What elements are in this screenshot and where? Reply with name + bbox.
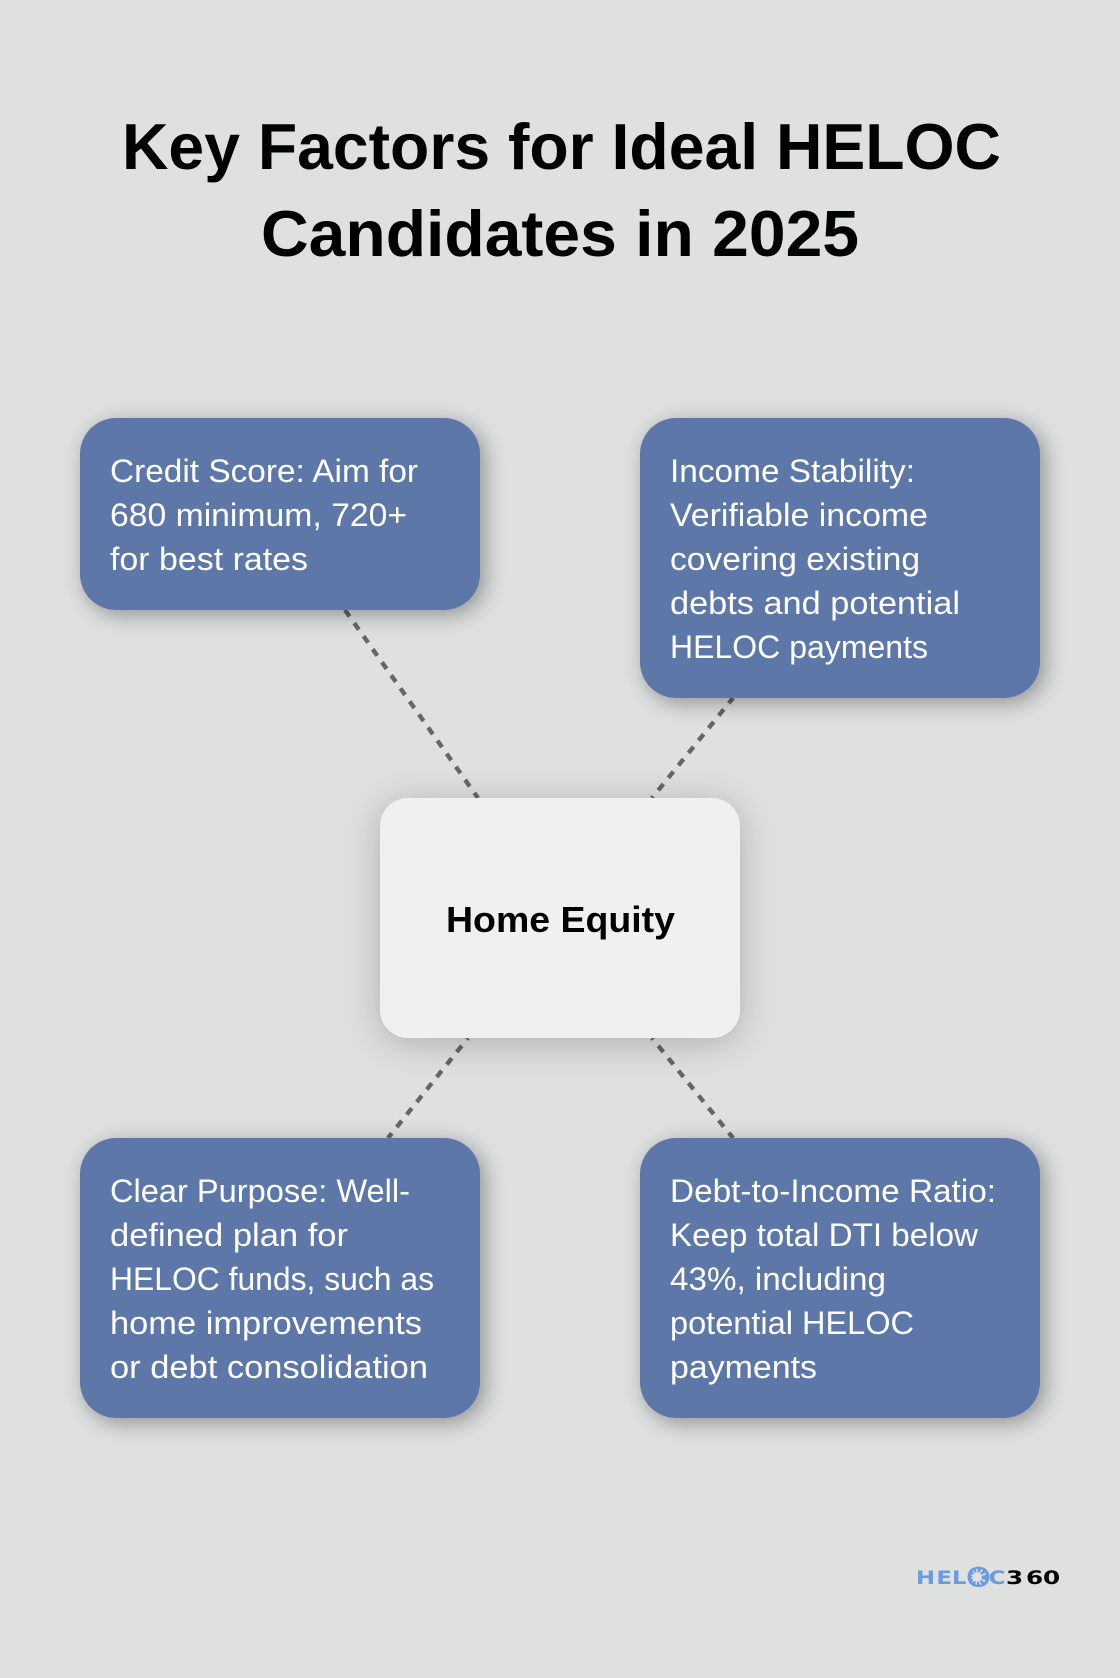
panel: clear purpose: defined plan for: [110, 1217, 348, 1253]
panel: income stability: Income Stability:: [670, 453, 915, 489]
panel: home equity center: Home Equity: [446, 899, 675, 940]
title: [122, 110, 1001, 270]
logo: HELOC360: O: [966, 1562, 991, 1594]
panel: clear purpose: [80, 1138, 480, 1418]
panel: income stability: Verifiable income: [670, 497, 928, 533]
panel: debt-to-income ratio: payments: [670, 1349, 817, 1385]
panel: debt-to-income ratio: Debt-to-Income Ratio:: [670, 1173, 996, 1209]
logo: HELOC360: HEL: [916, 1567, 967, 1589]
panel: clear purpose: Clear Purpose: Well-: [110, 1173, 410, 1209]
panel: home equity center: [380, 798, 740, 1038]
panel: clear purpose: or debt consolidation: [110, 1349, 428, 1385]
panel: debt-to-income ratio: [640, 1138, 1040, 1418]
panel: credit score: [80, 418, 480, 610]
panel: credit score: for best rates: [110, 541, 308, 577]
connector: income stability to home equity: [652, 698, 733, 798]
panel: income stability: covering existing: [670, 541, 920, 577]
logo: HELOC360: [916, 1562, 1060, 1594]
title: Key Factors for Ideal HELOC: [122, 110, 1001, 183]
connector: debt-to-income to home equity: [652, 1038, 733, 1138]
panel: credit score: 680 minimum, 720+: [110, 497, 407, 533]
title: Candidates in 2025: [261, 197, 859, 270]
panel: income stability: [640, 418, 1040, 698]
connector: credit score to home equity: [345, 610, 478, 798]
panel: credit score: Credit Score: Aim for: [110, 453, 418, 489]
panel: clear purpose: HELOC funds, such as: [110, 1261, 434, 1297]
panel: income stability: debts and potential: [670, 585, 960, 621]
panel: debt-to-income ratio: 43%, including: [670, 1261, 886, 1297]
panel: debt-to-income ratio: potential HELOC: [670, 1305, 914, 1341]
logo: HELOC360: C: [989, 1567, 1005, 1589]
panel: clear purpose: home improvements: [110, 1305, 422, 1341]
panel: income stability: HELOC payments: [670, 629, 928, 665]
logo: HELOC360: 360: [1006, 1568, 1060, 1589]
connector: clear purpose to home equity: [388, 1038, 468, 1138]
panel: debt-to-income ratio: Keep total DTI below: [670, 1217, 979, 1253]
